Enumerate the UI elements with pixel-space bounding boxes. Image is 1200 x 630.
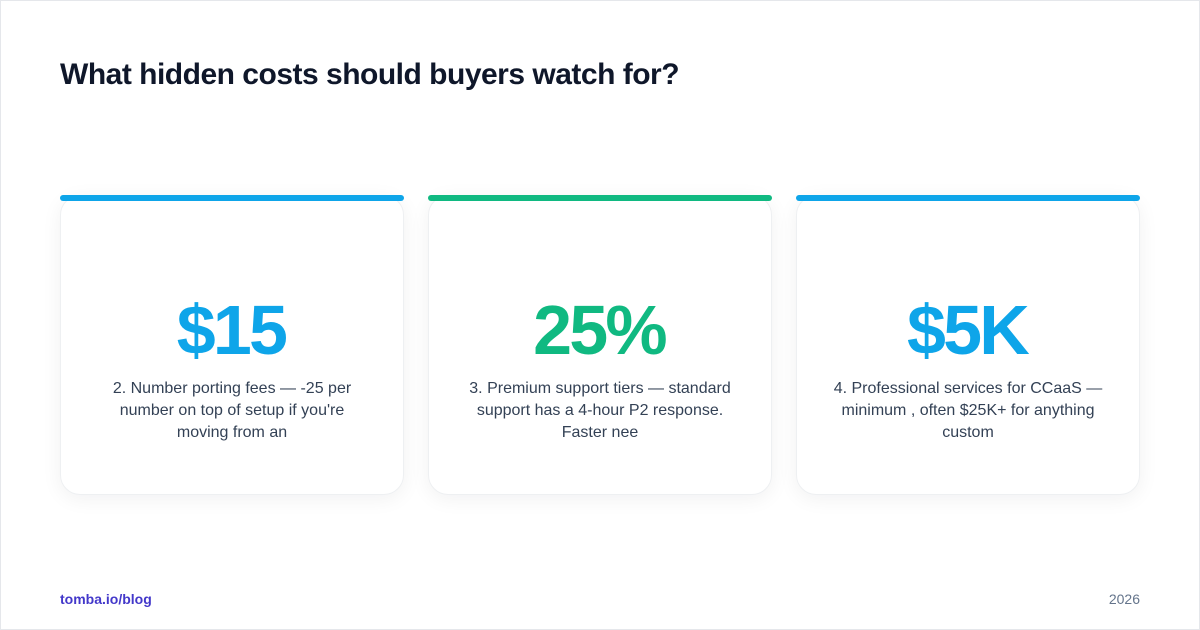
panel: professional services bbox=[796, 195, 1140, 496]
title: What hidden costs should buyers watch for? bbox=[60, 58, 679, 91]
accent bar: green bbox=[428, 195, 772, 201]
description: premium support: 3. Premium support tiers — standard support has a 4-hour P2 response. Faster nee bbox=[469, 380, 731, 441]
description: professional services: 4. Professional services for CCaaS — minimum , often $25K+ for anything custom bbox=[834, 380, 1102, 441]
accent bar: blue bbox=[60, 195, 404, 201]
accent bar: blue bbox=[796, 195, 1140, 201]
panel: premium support bbox=[428, 195, 772, 496]
panel: porting fees bbox=[60, 195, 404, 496]
footer brand: tomba.io/blog bbox=[60, 591, 152, 607]
stat: $15: $15 bbox=[177, 291, 285, 369]
stat: 25%: 25% bbox=[533, 291, 665, 369]
stat: $5K: $5K bbox=[907, 291, 1027, 369]
description: porting fees: 2. Number porting fees — -25 per number on top of setup if you're moving from an bbox=[113, 380, 351, 441]
footer year: 2026 bbox=[1109, 591, 1140, 607]
